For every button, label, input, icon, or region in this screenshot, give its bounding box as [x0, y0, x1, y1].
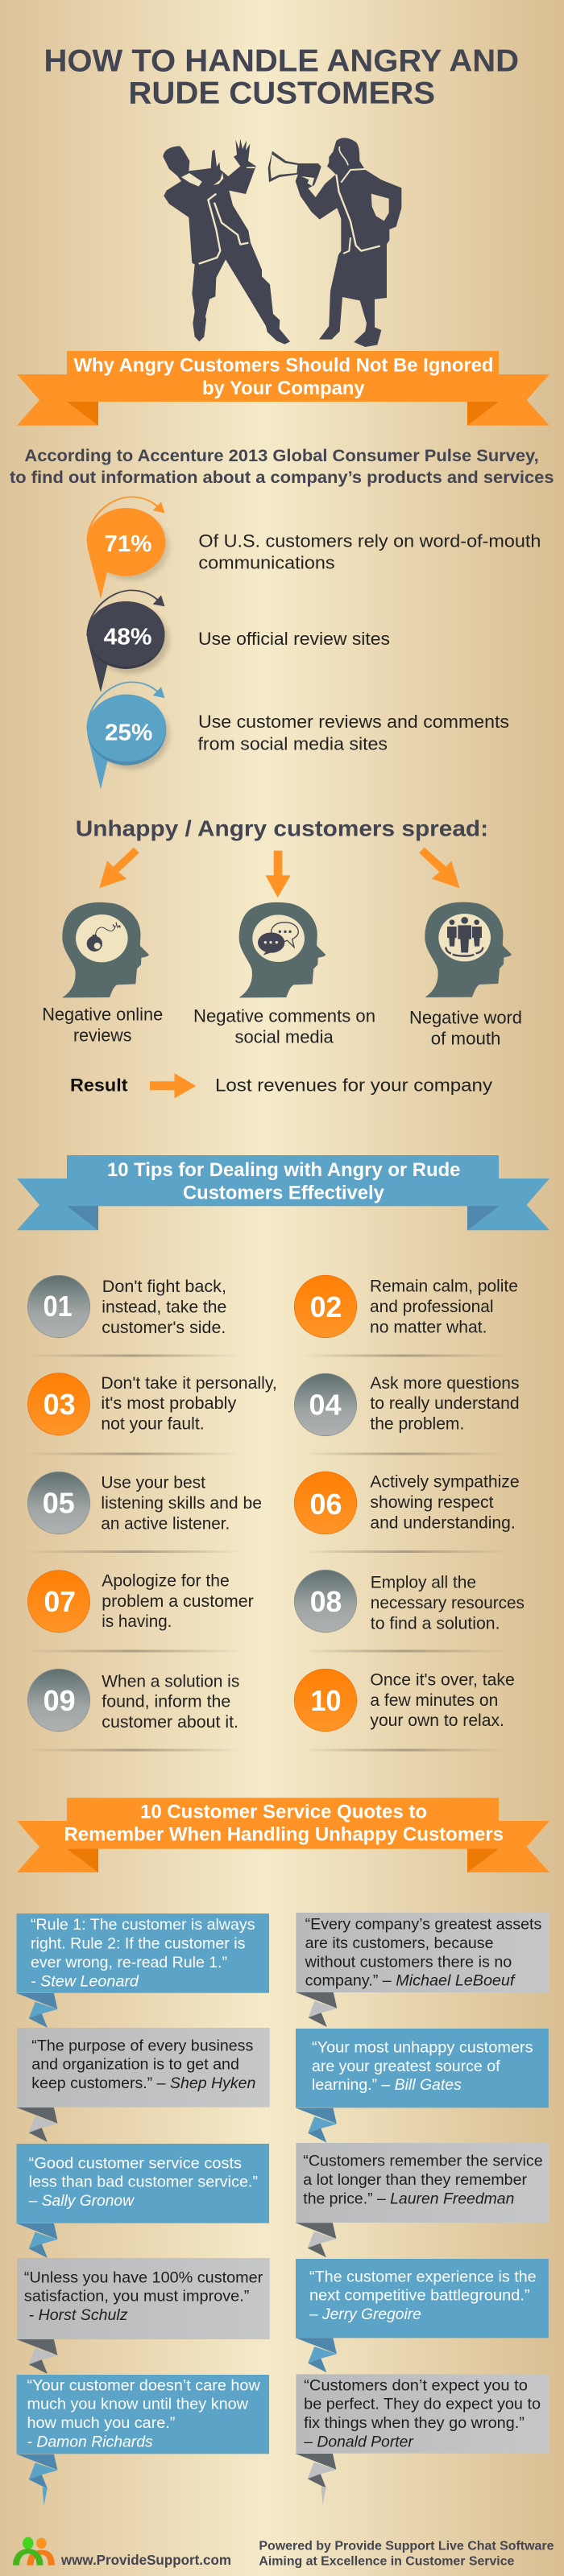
tip 05: an active listener.: [101, 1514, 230, 1533]
caption: negative online reviews: [42, 1004, 163, 1045]
tip 07: 07: [44, 1585, 76, 1618]
caption: negative comments: [193, 1005, 375, 1047]
tip 04: the problem.: [370, 1414, 464, 1433]
banner: 10 quotes: [17, 1798, 549, 1872]
quote 8: Jerry Gregoire: [296, 2259, 549, 2372]
quote 6: Lauren Freedman: a lot longer than they remember: [303, 2171, 528, 2189]
tip 03: not your fault.: [101, 1414, 205, 1433]
quote 7: Horst Schulz: - Horst Schulz: [29, 2306, 128, 2324]
icon: head with bomb: [62, 902, 149, 997]
panel: tips: [27, 1275, 525, 1732]
tip 02: 02: [310, 1290, 342, 1323]
tip 10: 10: [311, 1684, 342, 1717]
quote 6: Lauren Freedman: [295, 2143, 549, 2257]
caption: negative word of mouth: Negative word: [409, 1008, 522, 1028]
tip 10: your own to relax.: [370, 1711, 504, 1730]
quote 9: Damon Richards: how much you care.”: [27, 2414, 175, 2432]
figure: woman: [296, 138, 401, 347]
banner: why angry customers: Why Angry Customers Should Not Be Ignored: [74, 354, 493, 376]
quote 9: Damon Richards: [16, 2375, 269, 2506]
panel: spread paths: [42, 848, 522, 1049]
caption: negative comments: Negative comments on: [193, 1005, 375, 1026]
quote 5: Sally Gronow: [16, 2144, 269, 2258]
title: RUDE CUSTOMERS: [128, 76, 435, 111]
quote 1: Stew Leonard: right. Rule 2: If the customer is: [31, 1935, 246, 1953]
bubble: 48%: [87, 590, 390, 692]
quote 8: Jerry Gregoire: next competitive battleground.”: [309, 2287, 530, 2305]
caption: negative word of mouth: [409, 1008, 522, 1049]
quote 2: Michael LeBoeuf: company.” – Michael LeBoeuf: [305, 1972, 516, 1990]
quote 3: Shep Hyken: keep customers.” – Shep Hyken: [31, 2074, 255, 2092]
survey heading: According to Accenture 2013 Global Consumer Pulse Survey,: [24, 447, 539, 465]
footer: www.ProvideSupport.com: [60, 2552, 231, 2568]
tip 01: 01: [44, 1290, 73, 1323]
tip 09: When a solution is: [102, 1672, 239, 1690]
tip 03: [27, 1373, 277, 1435]
tip 06: [294, 1472, 520, 1534]
quote 5: Sally Gronow: “Good customer service costs: [29, 2154, 242, 2172]
quote 4: Bill Gates: are your greatest source of: [312, 2058, 500, 2075]
panel: survey bubbles: [87, 497, 541, 790]
footer: [16, 2537, 554, 2569]
quote 1: Stew Leonard: [16, 1913, 269, 2028]
tip 05: [27, 1472, 262, 1534]
quote 1: Stew Leonard: ever wrong, re-read Rule 1.”: [31, 1954, 227, 1971]
result row: Lost revenues for your company: [215, 1075, 492, 1096]
tip 09: found, inform the: [102, 1693, 230, 1711]
quote 2: Michael LeBoeuf: are its customers, because: [305, 1934, 493, 1952]
tip 08: to find a solution.: [371, 1614, 500, 1633]
tip 02: Remain calm, polite: [370, 1277, 518, 1295]
quote 4: Bill Gates: “Your most unhappy customers: [312, 2038, 533, 2056]
quote 9: Damon Richards: - Damon Richards: [27, 2433, 153, 2450]
quote 9: Damon Richards: much you know until they know: [27, 2396, 249, 2413]
quote 5: Sally Gronow: – Sally Gronow: [28, 2192, 135, 2210]
title: [44, 44, 519, 111]
quote 3: Shep Hyken: “The purpose of every business: [31, 2037, 254, 2054]
banner: 10 tips: [17, 1155, 549, 1230]
caption: negative comments: social media: [235, 1027, 334, 1047]
tip 05: 05: [43, 1486, 75, 1520]
caption: negative online reviews: reviews: [73, 1025, 131, 1045]
tip 09: [27, 1669, 239, 1732]
arrow: right: [419, 848, 459, 888]
quote 5: Sally Gronow: less than bad customer service.”: [29, 2174, 258, 2191]
icon: head with people: [425, 902, 512, 997]
quote 6: Lauren Freedman: “Customers remember the service: [303, 2152, 543, 2169]
tip 03: it's most probably: [101, 1394, 237, 1413]
quote 4: Bill Gates: [296, 2029, 549, 2143]
tip 07: problem a customer: [102, 1592, 254, 1611]
tip 02: [294, 1275, 518, 1338]
result row: Result: [70, 1075, 128, 1096]
tip 07: Apologize for the: [102, 1572, 230, 1591]
bubble: 25%: 25%: [105, 720, 153, 745]
survey heading: to find out information about a company’s products and services: [10, 469, 554, 487]
tip 10: [294, 1669, 515, 1732]
bubble: 71%: Of U.S. customers rely on word-of-mouth: [198, 530, 541, 551]
quote 10: Donald Porter: be perfect. They do expect you to: [304, 2396, 541, 2413]
tip 06: showing respect: [370, 1493, 494, 1512]
arrow: result: [150, 1073, 196, 1098]
quote 2: Michael LeBoeuf: [296, 1913, 549, 2027]
quote 6: Lauren Freedman: the price.” – Lauren Freedman: [303, 2190, 514, 2207]
tip 08: 08: [310, 1585, 342, 1618]
quote 7: Horst Schulz: satisfaction, you must improve.”: [24, 2288, 249, 2306]
tip 04: to really understand: [370, 1394, 520, 1413]
arrow: middle: [265, 851, 291, 898]
title: HOW TO HANDLE ANGRY AND: [44, 44, 519, 79]
bubble: 71%: [87, 497, 541, 599]
tip 06: Actively sympathize: [370, 1473, 520, 1492]
tip 06: 06: [309, 1488, 342, 1521]
tip 03: Don't take it personally,: [101, 1374, 277, 1393]
quote 3: Shep Hyken: and organization is to get and: [31, 2056, 239, 2074]
bubble: 48%: Use official review sites: [198, 629, 390, 649]
tip 09: 09: [44, 1684, 76, 1717]
quote 7: Horst Schulz: “Unless you have 100% customer: [24, 2268, 263, 2286]
tip 04: Ask more questions: [370, 1374, 520, 1393]
tip 08: [294, 1570, 525, 1633]
bubble: 71%: 71%: [105, 531, 152, 557]
tip 01: Don't fight back,: [102, 1278, 226, 1296]
icon: Provide Support logo: [16, 2537, 52, 2566]
quote 1: Stew Leonard: - Stew Leonard: [31, 1972, 139, 1990]
tip 05: Use your best: [101, 1473, 205, 1492]
tip 01: [27, 1275, 226, 1338]
tip 06: and understanding.: [370, 1513, 516, 1532]
quote 4: Bill Gates: learning.” – Bill Gates: [312, 2076, 462, 2094]
caption: negative word of mouth: of mouth: [431, 1029, 500, 1049]
arrow: left: [99, 848, 139, 888]
banner: why angry customers: by Your Company: [202, 378, 365, 399]
caption: negative online reviews: Negative online: [42, 1004, 163, 1024]
tip 04: 04: [309, 1388, 342, 1422]
tip 08: necessary resources: [371, 1594, 525, 1612]
tip 07: [27, 1571, 254, 1633]
banner: 10 quotes: 10 Customer Service Quotes to: [140, 1801, 427, 1823]
quote 3: Shep Hyken: [16, 2028, 270, 2142]
banner: 10 tips: 10 Tips for Dealing with Angry or Rude: [107, 1159, 460, 1181]
icon: megaphone: [268, 151, 321, 188]
bubble: 48%: 48%: [104, 625, 152, 650]
quote 10: Donald Porter: fix things when they go wrong.”: [304, 2414, 525, 2432]
icon: head with speech bubbles: [239, 902, 326, 997]
bubble: 25%: Use customer reviews and comments: [198, 712, 509, 732]
tip 03: 03: [44, 1388, 76, 1421]
tip 09: customer about it.: [102, 1713, 238, 1732]
quote 10: Donald Porter: [295, 2374, 549, 2505]
tip 08: Employ all the: [371, 1574, 476, 1592]
quote 8: Jerry Gregoire: “The customer experience is the: [309, 2268, 537, 2285]
quote 1: Stew Leonard: “Rule 1: The customer is always: [31, 1916, 255, 1934]
quote 7: Horst Schulz: [16, 2258, 270, 2374]
bubble: 25%: [87, 682, 509, 790]
survey heading: [10, 447, 554, 487]
footer: Aiming at Excellence in Customer Service: [259, 2555, 515, 2569]
tip 02: and professional: [370, 1298, 493, 1316]
dividers: [24, 1354, 508, 1752]
heading: unhappy customers spread: Unhappy / Angry customers spread:: [76, 815, 488, 840]
panel: quotes: [16, 1913, 549, 2506]
result row: [70, 1073, 492, 1098]
quote 10: Donald Porter: – Donald Porter: [303, 2433, 414, 2450]
tip 07: is having.: [102, 1612, 172, 1631]
banner: 10 tips: Customers Effectively: [183, 1182, 384, 1203]
bubble: 71%: communications: [198, 553, 335, 573]
tip 10: a few minutes on: [370, 1691, 498, 1710]
tip 05: listening skills and be: [101, 1494, 262, 1513]
illustration: man and woman with megaphone: [163, 138, 401, 347]
banner: 10 quotes: Remember When Handling Unhappy Customers: [64, 1824, 504, 1846]
quote 10: Donald Porter: “Customers don’t expect you to: [304, 2376, 528, 2394]
bubble: 25%: from social media sites: [198, 733, 388, 753]
tip 04: [294, 1373, 520, 1436]
footer: Powered by Provide Support Live Chat Software: [259, 2539, 554, 2553]
quote 9: Damon Richards: “Your customer doesn’t care how: [27, 2376, 261, 2394]
tip 01: instead, take the: [102, 1298, 226, 1317]
figure: man: [163, 138, 290, 345]
quote 8: Jerry Gregoire: – Jerry Gregoire: [309, 2306, 421, 2323]
quote 2: Michael LeBoeuf: without customers there is no: [305, 1953, 512, 1971]
tip 02: no matter what.: [370, 1318, 487, 1336]
tip 10: Once it's over, take: [370, 1670, 515, 1689]
quote 2: Michael LeBoeuf: “Every company’s greatest assets: [305, 1915, 542, 1933]
banner: why angry customers: [17, 351, 549, 426]
tip 01: customer's side.: [102, 1319, 226, 1337]
